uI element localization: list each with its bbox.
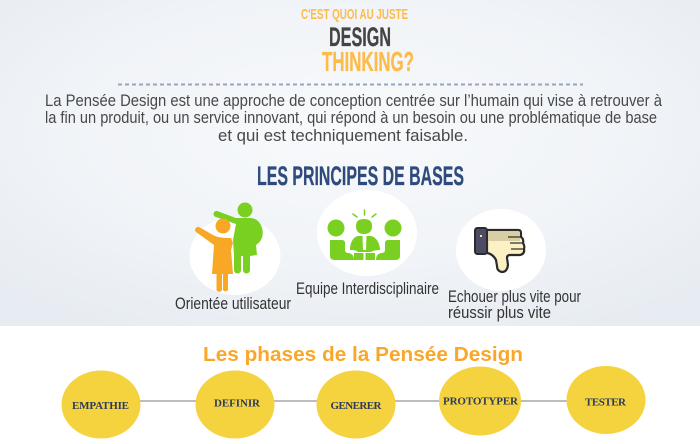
- label: fail fast: réussir plus vite: [448, 303, 551, 322]
- heading: principes: LES PRINCIPES DE BASES: [257, 161, 464, 191]
- title: THINKING?: [322, 46, 414, 77]
- panel: phases background: [0, 326, 700, 444]
- label: user centered: Orientée utilisateur: [175, 294, 291, 313]
- label: fail fast: [448, 287, 581, 322]
- intro text block: et qui est techniquement faisable.: [218, 126, 468, 145]
- principle: fail fast: [448, 209, 581, 322]
- icon: two people: [195, 202, 263, 292]
- phase: definir: DEFINIR: [214, 398, 261, 410]
- panel: header background: [0, 0, 700, 326]
- heading: phases: Les phases de la Pensée Design: [203, 344, 523, 366]
- label: fail fast: Echouer plus vite pour: [448, 287, 581, 306]
- phase: prototyper: [439, 366, 521, 436]
- phase: definir: [196, 370, 274, 438]
- phase: tester: [566, 366, 646, 434]
- intro text block: [45, 91, 662, 145]
- phase: generer: GENERER: [330, 400, 383, 412]
- icon: team of three: [328, 210, 402, 260]
- title: C'EST QUOI AU JUSTE: [301, 6, 408, 23]
- principle: user centered: [175, 202, 291, 313]
- phase: generer: [316, 370, 396, 438]
- connector line: [138, 400, 568, 402]
- icon: thumbs down: [475, 228, 524, 272]
- title: DESIGN: [329, 22, 391, 52]
- principle: team: [296, 190, 439, 298]
- title: [301, 6, 414, 77]
- label: team: Equipe Interdisciplinaire: [296, 279, 439, 298]
- phase: prototyper: PROTOTYPER: [443, 396, 519, 408]
- phase: empathie: [62, 370, 140, 438]
- phase timeline: [62, 366, 646, 438]
- phase: tester: TESTER: [585, 396, 627, 408]
- phase: empathie: EMPATHIE: [72, 400, 129, 412]
